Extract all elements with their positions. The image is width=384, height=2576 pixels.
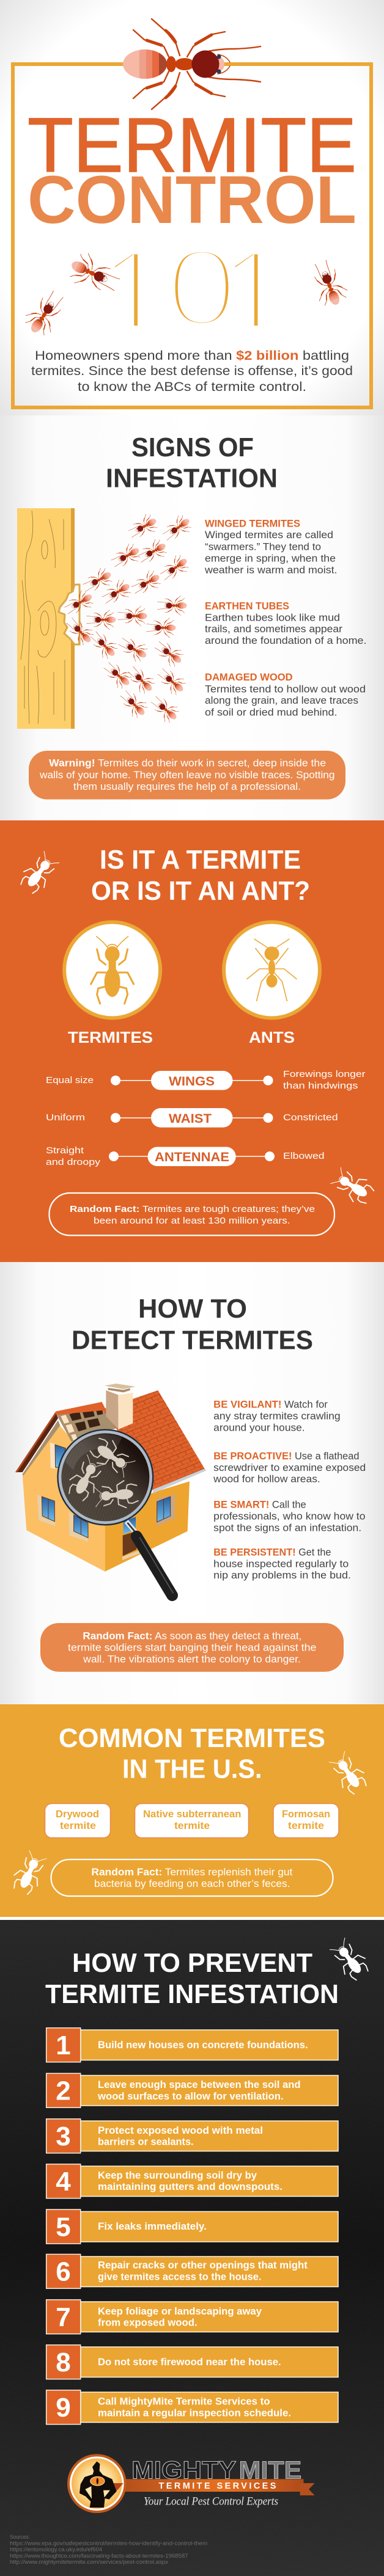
text block: be persistent: BE PERSISTENT! Get the [213, 1547, 331, 1558]
intro text: termites. Since the best defense is offense, it’s good [31, 364, 353, 378]
text block: damaged wood: DAMAGED WOOD [205, 672, 293, 683]
card: formosan termite [273, 1803, 339, 1837]
step 3 [46, 2119, 338, 2153]
text block: winged termites: WINGED TERMITES [205, 518, 300, 529]
text block: winged termites: weather is warm and moist. [204, 564, 338, 575]
step 8: 8 [56, 2348, 71, 2377]
step 8 [46, 2345, 338, 2379]
step 9: Call MightyMite Termite Services to [98, 2396, 270, 2407]
heading: how to prevent termite infestation: HOW TO PREVENT [72, 1948, 312, 1978]
text block: be proactive: wood for hollow areas. [213, 1473, 320, 1484]
step 6: Repair cracks or other openings that might [98, 2260, 308, 2271]
comparison row: wings: than hindwings [283, 1081, 358, 1091]
card: drywood termite: Drywood [56, 1808, 99, 1820]
card: native subterranean termite [135, 1803, 248, 1837]
step 6: give termites access to the house. [98, 2271, 262, 2283]
comparison row: waist: WAIST [169, 1112, 212, 1126]
text block: be persistent: house inspected regularly to [213, 1558, 349, 1569]
heading: common termites in the us: IN THE U.S. [122, 1754, 262, 1784]
label: termites: TERMITES [68, 1028, 153, 1046]
icon: small termite two [20, 286, 70, 340]
sources: https://www.thoughtco.com/fascinating-facts-about-termites-1968587 [10, 2553, 188, 2560]
comparison row: waist: Constricted [283, 1112, 338, 1123]
step 7: 7 [56, 2302, 71, 2332]
step 5: Fix leaks immediately. [98, 2220, 207, 2232]
callout: random fact gut bacteria [51, 1859, 333, 1896]
heading: signs of infestation: SIGNS OF [131, 432, 254, 462]
callout: random fact soldiers [40, 1623, 344, 1672]
text block: be proactive [213, 1451, 366, 1484]
heading: is it a termite or an ant: OR IS IT AN ANT? [91, 876, 310, 906]
callout: warning: walls of your home. They often leave no visible traces. Spotting [39, 770, 335, 781]
card: drywood termite: termite [60, 1820, 96, 1831]
step 9 [46, 2390, 338, 2425]
text block: be proactive: screwdriver to examine exposed [213, 1462, 366, 1473]
text block: be smart: professionals, who know how to [213, 1511, 366, 1522]
title: 101: 0 [166, 226, 238, 349]
icon: white termite [327, 1936, 372, 1983]
text block: damaged wood [205, 672, 366, 718]
sources: https://www.epa.gov/safepestcontrol/termites-how-identify-and-control-them [10, 2540, 207, 2547]
sources: https://entomology.ca.uky.edu/ef604 [10, 2547, 102, 2553]
icon: termite under lens top [87, 1434, 138, 1480]
text block: earthen tubes: around the foundation of a home. [205, 635, 367, 646]
icon: white termite right [327, 1750, 371, 1797]
step 9: maintain a regular inspection schedule. [98, 2407, 291, 2419]
sources: http://www.mightymitetermite.com/services/pest-control.aspx [10, 2559, 168, 2566]
heading: how to prevent termite infestation: TERMITE INFESTATION [45, 1979, 339, 2009]
text block: damaged wood: of soil or dried mud behind. [205, 707, 338, 718]
sources [10, 2534, 207, 2566]
step 1 [46, 2028, 338, 2062]
step 2 [46, 2073, 338, 2107]
text block: winged termites: Winged termites are called [205, 530, 333, 541]
step 4: maintaining gutters and downspouts. [98, 2181, 282, 2192]
icon: termite in circle [64, 922, 160, 1018]
callout: random fact soldiers: wall. The vibrations alert the colony to danger. [83, 1654, 301, 1665]
comparison row: antennae: ANTENNAE [155, 1150, 229, 1164]
step 7 [46, 2300, 338, 2334]
text block: be vigilant [213, 1399, 341, 1433]
comparison row: wings: Equal size [46, 1075, 94, 1085]
text block: be vigilant: any stray termites crawling [213, 1411, 341, 1422]
illustration: swarm of termites [61, 511, 194, 726]
heading: signs of infestation: INFESTATION [106, 463, 278, 494]
callout: random fact soldiers: termite soldiers start banging their head against the [68, 1642, 317, 1653]
comparison row: waist [46, 1108, 338, 1128]
panel: title frame [13, 64, 371, 407]
card: drywood termite [45, 1803, 110, 1837]
comparison row: waist: Uniform [46, 1112, 85, 1123]
panel: signs of infestation background [0, 415, 384, 820]
callout: warning [29, 751, 345, 800]
heading: is it a termite or an ant: IS IT A TERMITE [100, 845, 301, 875]
step 3: Protect exposed wood with metal [98, 2125, 263, 2136]
step 3: barriers or sealants. [98, 2136, 194, 2147]
text block: be smart [213, 1500, 366, 1533]
title: 101 [115, 252, 258, 326]
intro text: Homeowners spend more than $2 billion battling [35, 349, 349, 363]
heading: common termites in the us: COMMON TERMITES [59, 1723, 325, 1753]
text block: earthen tubes [205, 601, 367, 646]
comparison row: antennae: and droopy [46, 1157, 101, 1167]
text block: be vigilant: around your house. [213, 1422, 305, 1433]
heading: common termites in the us [59, 1723, 325, 1784]
icon: magnifying glass [57, 1429, 173, 1596]
step 4: Keep the surrounding soil dry by [98, 2169, 257, 2181]
step 4: 4 [56, 2167, 71, 2197]
panel: prevent termite infestation [0, 1920, 384, 2576]
illustration: chewed wood plank [17, 508, 79, 729]
panel: detect background [0, 1262, 384, 1704]
icon: large termite [123, 19, 260, 109]
heading: how to detect termites: HOW TO [138, 1294, 247, 1324]
text block: be persistent [213, 1547, 351, 1581]
step 1: 1 [56, 2031, 71, 2060]
step 1: Build new houses on concrete foundations. [98, 2039, 308, 2051]
callout: random fact age: Random Fact: Termites are tough creatures; they’ve [70, 1204, 315, 1214]
icon: white termite left [9, 1849, 50, 1897]
callout: random fact age [49, 1193, 334, 1235]
text block: earthen tubes: trails, and sometimes appear [205, 624, 343, 635]
step 8: Do not store firewood near the house. [98, 2356, 281, 2368]
callout: random fact soldiers: Random Fact: As soon as they detect a threat, [83, 1631, 301, 1642]
icon: ant in circle [224, 922, 320, 1018]
sources: Sources: [10, 2534, 30, 2541]
panel: common termites [0, 1704, 384, 1917]
white stripe [0, 1917, 384, 1920]
icon: small termite three [306, 257, 351, 310]
text block: winged termites [204, 518, 338, 575]
text block: winged termites: emerge in spring, when the [205, 553, 336, 564]
heading: how to prevent termite infestation [45, 1948, 339, 2009]
step 3: 3 [56, 2122, 71, 2151]
title: termite: TERMITE [28, 102, 356, 188]
icon: termite under lens right [94, 1480, 139, 1510]
step 5: 5 [56, 2212, 71, 2242]
step 7: Keep foliage or landscaping away [98, 2305, 262, 2317]
text block: be persistent: nip any problems in the bud. [213, 1570, 351, 1581]
card: formosan termite: termite [288, 1820, 324, 1831]
title: 101: 1 [220, 225, 288, 361]
title: 101: 1 [100, 225, 168, 361]
illustration: house with magnifying glass [15, 1384, 206, 1596]
icon: small termite one [65, 249, 124, 299]
comparison row: wings: Forewings longer [283, 1069, 366, 1079]
title: control: CONTROL [28, 162, 356, 238]
step 4 [46, 2164, 338, 2198]
step 2: wood surfaces to allow for ventilation. [97, 2090, 284, 2102]
card: formosan termite: Formosan [282, 1808, 330, 1820]
text block: be smart: spot the signs of an infestation. [213, 1522, 361, 1533]
text block: be smart: BE SMART! Call the [213, 1500, 306, 1511]
icon: termite under lens left [64, 1453, 108, 1503]
heading: is it a termite or an ant [91, 845, 310, 906]
step 7: from exposed wood. [98, 2317, 198, 2329]
text block: winged termites: “swarmers.” They tend to [205, 541, 321, 552]
icon: white termite lower right [329, 1165, 377, 1208]
text block: be proactive: BE PROACTIVE! Use a flathead [213, 1451, 360, 1462]
comparison row: wings: WINGS [169, 1075, 215, 1089]
step 2: 2 [56, 2076, 71, 2106]
logo: mightymite: MITE [238, 2456, 301, 2484]
step 5 [46, 2209, 338, 2244]
comparison row: antennae [46, 1145, 325, 1167]
heading: how to detect termites [72, 1294, 313, 1356]
logo: mightymite [67, 2454, 315, 2513]
text block: earthen tubes: Earthen tubes look like mud [205, 613, 340, 624]
text block: earthen tubes: EARTHEN TUBES [205, 601, 289, 612]
logo: mightymite: MIGHTY [131, 2456, 236, 2484]
intro text: to know the ABCs of termite control. [78, 380, 306, 394]
step 6: 6 [56, 2257, 71, 2287]
logo: mightymite: Your Local Pest Control Experts [144, 2495, 278, 2508]
panel: termite or ant [0, 820, 384, 1262]
comparison row: wings [46, 1069, 366, 1091]
icon: logo hero badge [67, 2454, 127, 2513]
panel: intro background [0, 0, 384, 415]
heading: how to detect termites: DETECT TERMITES [72, 1326, 313, 1356]
callout: random fact gut bacteria: bacteria by feeding on each other’s feces. [94, 1878, 290, 1889]
callout: warning: Warning! Termites do their work in secret, deep inside the [49, 758, 326, 769]
text block: damaged wood: Termites tend to hollow out wood [205, 684, 366, 695]
text block: damaged wood: along the grain, and leave traces [205, 695, 358, 706]
callout: random fact age: been around for at least 130 million years. [94, 1216, 290, 1226]
callout: random fact gut bacteria: Random Fact: Termites replenish their gut [91, 1867, 293, 1878]
icon: white termite upper left [17, 849, 62, 897]
step 6 [46, 2254, 338, 2288]
step 2: Leave enough space between the soil and [98, 2079, 301, 2090]
intro text [31, 349, 353, 394]
step 9: 9 [56, 2393, 71, 2423]
logo: mightymite: TERMITE SERVICES [159, 2481, 276, 2491]
heading: signs of infestation [106, 432, 278, 494]
comparison row: antennae: Straight [46, 1145, 84, 1156]
text block: be vigilant: BE VIGILANT! Watch for [213, 1399, 328, 1410]
card: native subterranean termite: Native subterranean [143, 1808, 241, 1820]
comparison row: antennae: Elbowed [283, 1151, 325, 1161]
card: native subterranean termite: termite [174, 1820, 210, 1831]
label: ants: ANTS [249, 1028, 295, 1046]
callout: warning: them usually requires the help of a professional. [73, 781, 301, 792]
